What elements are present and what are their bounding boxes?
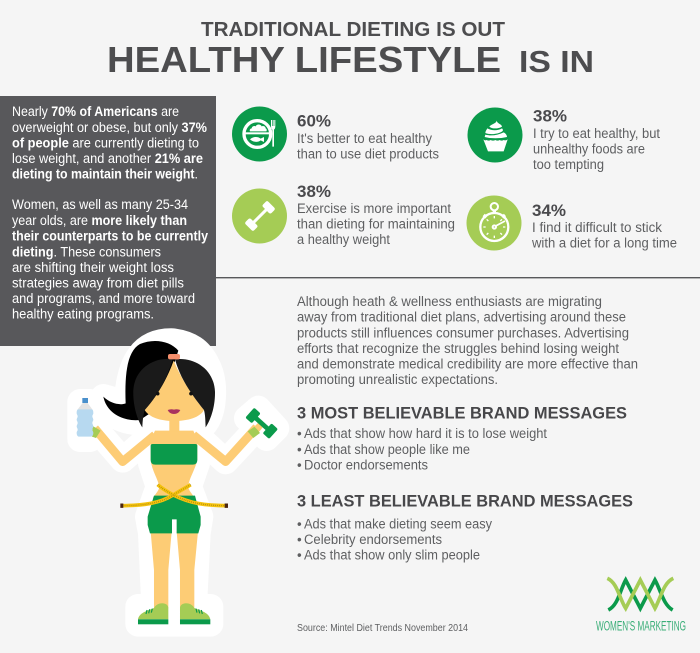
stat: 38% unhealthy foods: too tempting	[533, 157, 604, 172]
title: IS IN	[519, 44, 594, 79]
front hair	[133, 359, 215, 427]
text block: women and young adults: Women, as well as many 25-34	[12, 197, 189, 212]
heading: least believable: 3 LEAST BELIEVABLE BRAND MESSAGES	[297, 492, 633, 510]
eyes and mouth	[156, 392, 193, 414]
stat: 60% eat healthy	[297, 112, 439, 162]
text block: women and young adults: dieting. These consumers	[12, 244, 161, 260]
list: least believable messages: Ads that make dieting seem easy	[304, 516, 492, 532]
text block: women and young adults: their counterparts to be currently	[12, 228, 209, 244]
stat: 60% eat healthy: It's better to eat healthy	[297, 131, 432, 146]
title	[107, 19, 594, 80]
text block: women and young adults: year olds, are more likely than	[12, 213, 187, 228]
illustration: woman with bottle, dumbbell and tape measure	[77, 341, 278, 624]
title: HEALTHY LIFESTYLE	[107, 39, 501, 80]
water bottle	[77, 398, 93, 437]
list: least believable messages	[297, 516, 492, 563]
list: most believable messages: Doctor endorsements	[304, 458, 428, 472]
torso	[151, 431, 197, 498]
text block: advertising paragraph: efforts that recognize the struggles behind losing weight	[297, 341, 619, 356]
stat: 38% exercise: 38%	[297, 182, 331, 201]
stat: 38% exercise: Exercise is more important	[297, 201, 451, 216]
shorts	[148, 496, 201, 533]
logo: Women's Marketing	[596, 578, 686, 634]
text block: women and young adults: healthy eating programs.	[12, 306, 154, 322]
list: most believable messages: •	[297, 458, 302, 472]
text block: advertising paragraph	[297, 294, 638, 387]
hand with dumbbell	[245, 408, 278, 439]
stat: 38% exercise: than dieting for maintaining	[297, 216, 455, 232]
list: most believable messages: Ads that show people like me	[304, 442, 470, 457]
stat: 38% unhealthy foods: unhealthy foods are	[533, 142, 645, 156]
text block: women and young adults: are shifting their weight loss	[12, 260, 174, 275]
stat: 38% unhealthy foods: I try to eat healthy, but	[533, 126, 660, 141]
list: most believable messages: •	[297, 426, 302, 441]
stat: 34% hard to stick: with a diet for a long time	[531, 236, 677, 250]
icon: stopwatch	[466, 196, 522, 250]
list: least believable messages: •	[297, 516, 302, 532]
stat: 34% hard to stick: I find it difficult to stick	[532, 220, 662, 235]
list: most believable messages	[297, 426, 547, 472]
text block: advertising paragraph: away from traditional diet plans, advertising around these	[297, 310, 626, 325]
shoes	[138, 603, 210, 624]
heading: most believable: 3 MOST BELIEVABLE BRAND MESSAGES	[297, 404, 627, 422]
stat: 34% hard to stick: 34%	[532, 201, 566, 220]
text block: advertising paragraph: and demonstrate medical credibility are more effective than	[297, 357, 638, 372]
list: most believable messages: •	[297, 442, 302, 457]
list: least believable messages: Celebrity endorsements	[304, 532, 442, 547]
list: least believable messages: •	[297, 532, 302, 547]
icon: plate and fork	[232, 106, 287, 162]
stat: 38% unhealthy foods	[533, 106, 660, 172]
stat: 38% exercise: a healthy weight	[297, 232, 390, 247]
icon: dumbbell	[232, 188, 287, 244]
stat: 34% hard to stick	[531, 201, 677, 250]
arms	[95, 427, 257, 462]
legs	[151, 532, 198, 608]
text block: dieting statistics	[12, 104, 207, 182]
wristbands	[92, 426, 260, 438]
hair tie	[168, 354, 180, 359]
list: least believable messages: Ads that show only slim people	[304, 548, 480, 563]
stat: 38% unhealthy foods: 38%	[533, 106, 567, 126]
face	[145, 361, 204, 421]
source note: Source: Mintel Diet Trends November 2014	[297, 623, 468, 634]
text block: women and young adults: strategies away from diet pills	[12, 276, 184, 290]
text block: advertising paragraph: Although heath & wellness enthusiasts are migrating	[297, 294, 602, 309]
text block: dieting statistics: Nearly 70% of Americans are	[12, 104, 179, 119]
text block: advertising paragraph: products still influences consumer purchases. Advertising	[297, 325, 629, 340]
text block: dieting statistics: lose weight, and another 21% are	[12, 151, 203, 166]
text block: advertising paragraph: promoting unrealistic expectations.	[297, 372, 498, 387]
list: most believable messages: Ads that show how hard it is to lose weight	[304, 426, 547, 441]
tape measure	[120, 485, 228, 506]
list: least believable messages: •	[297, 548, 302, 563]
text block: women and young adults: and programs, and more toward	[12, 291, 195, 306]
text block: dieting statistics: dieting to maintain their weight.	[12, 166, 198, 182]
text block: dieting statistics: overweight or obese, but only 37%	[12, 120, 207, 135]
stat: 60% eat healthy: than to use diet products	[297, 146, 439, 162]
stat: 38% exercise	[297, 182, 455, 247]
ponytail hair	[103, 341, 178, 420]
stat: 60% eat healthy: 60%	[297, 112, 331, 130]
title: TRADITIONAL DIETING IS OUT	[201, 19, 505, 41]
panel: dark statistics summary	[0, 96, 216, 346]
icon: cupcake	[468, 108, 522, 162]
crop top	[151, 444, 197, 465]
text block: women and young adults	[12, 197, 209, 322]
text block: dieting statistics: of people are currently dieting to	[12, 136, 199, 150]
